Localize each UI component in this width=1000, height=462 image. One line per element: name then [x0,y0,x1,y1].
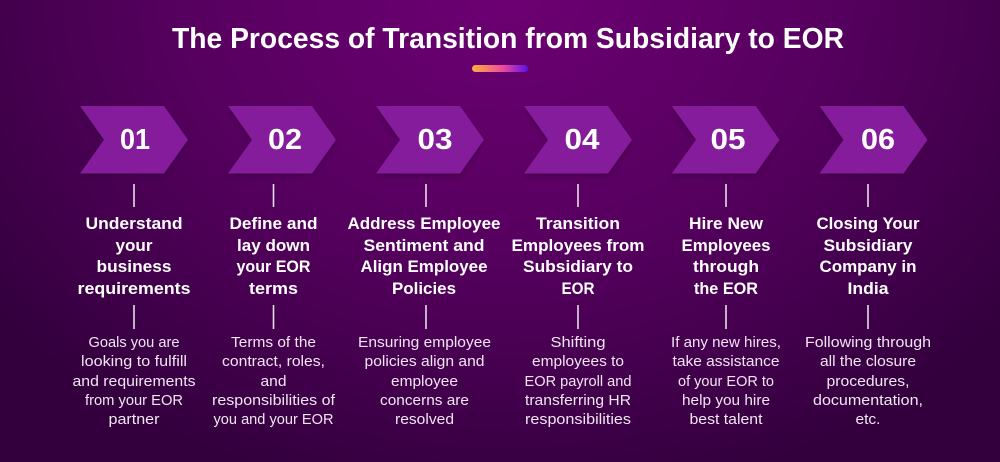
heading 04: Employees from [512,237,644,255]
description 01: looking to fulfill [81,354,187,370]
heading 06 [816,215,920,298]
heading 01 [78,215,190,298]
heading 04: Subsidiary to [523,258,633,276]
step 04 [512,106,644,428]
description 02: you and your EOR [214,412,334,428]
description 03: Ensuring employee [358,335,491,351]
description 02: Terms of the [231,335,316,351]
description 05: best talent [690,412,762,428]
chevron 05: 05 [710,124,746,156]
chevron 06 [820,106,928,174]
description 02: contract, roles, [222,354,325,370]
chevron 02: 02 [268,124,302,156]
description 03: employee [391,374,458,390]
chevron 05 [672,106,780,174]
chevron 02 [228,106,336,174]
description 06: documentation, [813,393,923,409]
description 04: transferring HR [525,393,631,409]
chevron 03 [376,106,484,174]
heading 05: the EOR [694,280,758,298]
description 05: help you hire [682,393,770,409]
description 01: Goals you are [88,335,180,351]
heading 01: business [96,258,172,276]
description 02: and [260,374,286,390]
chevron 06: 06 [861,124,895,156]
heading 01: your [116,237,153,255]
heading 02: your EOR [236,258,311,276]
heading 05: Employees [682,237,770,255]
chevron 01: 01 [120,124,150,156]
title accent bar [472,65,528,72]
heading 05 [682,215,770,298]
description 02: responsibilities of [212,393,336,409]
description 04: employees to [532,354,624,370]
description 05: take assistance [672,354,780,370]
chevron 01 [80,106,188,174]
heading 03: Policies [392,280,456,298]
heading 02 [230,215,318,298]
description 06: etc. [856,412,880,428]
step 06 [805,106,931,428]
description 01: from your EOR [85,393,183,409]
description 05: If any new hires, [671,335,781,351]
heading 03: Sentiment and [364,237,484,255]
description 04 [524,335,632,428]
description 04: responsibilities [525,412,631,428]
heading 02: terms [249,280,298,298]
heading 01: requirements [78,280,190,298]
step 05 [671,106,781,428]
description 03: concerns are [380,393,469,409]
heading 01: Understand [86,215,182,233]
chevron 04: 04 [564,124,600,156]
heading 03: Align Employee [360,258,488,276]
step 02 [212,106,336,428]
heading 02: Define and [230,215,318,233]
description 01 [72,335,196,428]
description 03: policies align and [364,354,484,370]
heading 04: Transition [536,215,620,233]
description 05: of your EOR to [678,374,774,390]
heading 06: India [848,280,889,298]
description 06 [805,335,931,428]
step 01 [72,106,196,428]
heading 06: Subsidiary [824,237,913,255]
heading 06: Closing Your [816,215,920,233]
description 06: all the closure [820,354,916,370]
description 05 [671,335,781,428]
description 06: procedures, [826,374,910,390]
heading 03 [348,215,500,298]
chevron 04 [524,106,632,174]
heading 05: Hire New [689,215,763,233]
chevron 03: 03 [418,124,452,156]
heading 04 [512,215,644,298]
step 03 [348,106,500,428]
description 06: Following through [805,335,931,351]
description 01: and requirements [72,374,196,390]
heading 04: EOR [562,280,595,298]
heading 05: through [693,258,759,276]
description 04: EOR payroll and [524,374,632,390]
description 03: resolved [395,412,454,428]
description 04: Shifting [550,335,606,351]
heading 03: Address Employee [348,215,500,233]
title: The Process of Transition from Subsidiary to EOR [172,23,844,55]
description 02 [212,335,336,428]
heading 02: lay down [237,237,310,255]
description 01: partner [108,412,160,428]
heading 06: Company in [820,258,916,276]
description 03 [358,335,491,428]
